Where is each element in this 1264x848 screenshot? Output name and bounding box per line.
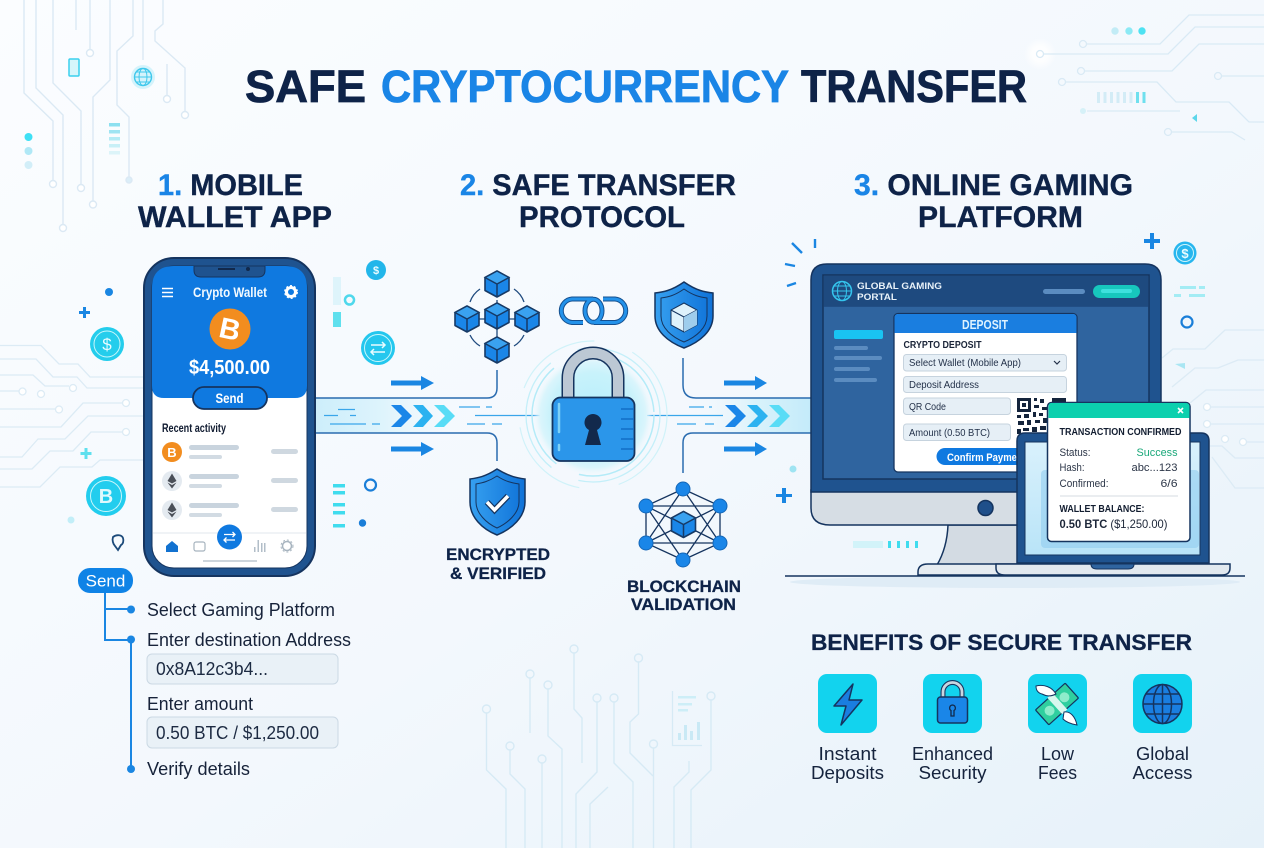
hash row [1060, 462, 1178, 474]
activity row: bitcoin: B [167, 445, 177, 460]
popup header [1048, 403, 1190, 418]
label: blockchain validation: VALIDATION [631, 595, 736, 614]
central padlock [519, 341, 667, 489]
panel: mobile wallet phone [144, 258, 315, 576]
icon: dollar coin [90, 327, 124, 361]
chin [811, 490, 1160, 525]
label: encrypted and verified: ENCRYPTED [446, 545, 550, 564]
select wallet field [904, 354, 1066, 371]
chevrons [391, 405, 455, 427]
field: amount: 0.50 BTC / $1,250.00 [156, 723, 319, 743]
popup heading: TRANSACTION CONFIRMED [1060, 426, 1182, 438]
decorative icons: top left [24, 59, 155, 169]
icon: chain link [561, 299, 626, 322]
menu icon [162, 288, 173, 296]
confirmed row: Confirmed: [1060, 478, 1108, 490]
decorative marks near monitor [776, 233, 1205, 548]
benefit: global access [1132, 674, 1192, 783]
send pill [78, 568, 133, 593]
icon: globe [131, 65, 155, 89]
portal name: PORTAL [857, 292, 897, 303]
send pill: Send [86, 572, 125, 590]
select wallet field: Select Wallet (Mobile App) [909, 357, 1021, 369]
label: Fees [1038, 763, 1077, 783]
divider [1060, 495, 1178, 497]
label: Low [1041, 744, 1075, 764]
transfer band right [647, 358, 811, 473]
portal header [824, 276, 1148, 307]
field: address: 0x8A12c3b4... [156, 659, 268, 679]
decorative circuit: top right [1024, 15, 1264, 140]
heading: benefits: BENEFITS OF SECURE TRANSFER [811, 630, 1192, 655]
hash row: Hash: [1060, 462, 1084, 474]
confirmed row [1060, 478, 1178, 490]
label [811, 744, 884, 783]
qr code field [904, 398, 1010, 414]
title: TRANSFER [801, 61, 1027, 112]
amount field [904, 424, 1010, 440]
label: Access [1132, 763, 1192, 783]
close icon [1178, 408, 1183, 413]
send steps list [78, 568, 351, 779]
decorative circuit: top left [24, 0, 188, 232]
step: verify: Verify details [147, 759, 250, 779]
label: Global [1136, 744, 1189, 764]
glow [519, 341, 667, 489]
label: blockchain validation: BLOCKCHAIN [627, 577, 741, 596]
step: destination: Enter destination Address [147, 630, 351, 650]
deposit address field: Deposit Address [909, 379, 979, 391]
label: encrypted and verified [446, 545, 550, 583]
keyhole [585, 414, 602, 445]
heading: step 2: PROTOCOL [519, 201, 685, 234]
qr code field: QR Code [909, 401, 946, 413]
qr code [1017, 398, 1066, 434]
decorative circuit: right middle [1162, 330, 1264, 488]
laptop base [996, 564, 1230, 575]
icon: globe [1143, 684, 1182, 724]
screen [823, 275, 1149, 479]
right bars and rings [333, 277, 376, 528]
bottom navigation [153, 533, 306, 562]
speed lines [647, 407, 723, 424]
icon: phone outline [69, 59, 79, 76]
phone body [144, 258, 315, 576]
benefit: low fees [1028, 674, 1087, 783]
heading: step 1: WALLET APP [138, 201, 332, 234]
swap button [217, 524, 242, 550]
recent activity label: Recent activity [162, 423, 226, 435]
bitcoin logo: B [216, 312, 243, 348]
panel: desktop monitor [811, 264, 1161, 575]
decorative circuit: bottom centre [482, 645, 715, 848]
decorative circuit: left middle [0, 346, 143, 487]
label [1038, 744, 1077, 783]
arrows [391, 376, 767, 456]
phone screen [152, 266, 307, 568]
shield outline glyph [113, 535, 123, 550]
amount field: Amount (0.50 BTC) [909, 427, 990, 439]
highlight and ticks [558, 404, 560, 450]
panel: confirmation popup [1048, 402, 1190, 542]
title: CRYPTOCURRENCY [381, 61, 789, 112]
status row: Status: [1060, 447, 1090, 459]
icon: blockchain cluster [455, 271, 539, 363]
heading: step 2: 2. SAFE TRANSFER [460, 169, 736, 202]
bitcoin logo [210, 308, 250, 350]
benefit: enhanced security [912, 674, 993, 783]
icon: blockchain network [639, 482, 727, 567]
globe logo [832, 282, 852, 300]
confirm button: Confirm Payme [947, 452, 1017, 464]
title [245, 61, 1027, 112]
laptop lid [1017, 433, 1209, 563]
activity row: ether [162, 471, 298, 491]
chevrons [725, 405, 790, 427]
activity row: bitcoin [162, 442, 298, 462]
panel: laptop [996, 402, 1230, 575]
decorative icons around phone [68, 260, 395, 550]
field: address [147, 654, 338, 684]
lock body [552, 398, 634, 461]
label: Security [918, 763, 986, 783]
deposit panel [894, 314, 1077, 472]
status row [1060, 447, 1178, 459]
hash row: abc...123 [1132, 462, 1178, 474]
label [1132, 744, 1192, 783]
plus and dots [79, 288, 113, 318]
wallet header [152, 266, 307, 398]
step: amount: Enter amount [147, 694, 253, 714]
confirmed row: 6/6 [1160, 478, 1178, 490]
nav pills [1043, 285, 1140, 298]
deposit header: DEPOSIT [962, 318, 1008, 332]
decorative marks near monitor: $ [1181, 246, 1189, 261]
field: amount [147, 717, 338, 748]
icon: padlock [938, 682, 968, 723]
speaker [218, 267, 250, 271]
icon: check shield [470, 469, 525, 535]
ground line [785, 576, 1245, 588]
heading: step 2 [460, 169, 736, 234]
icon: swap coin [361, 331, 395, 365]
activity row: ether [162, 500, 298, 520]
icon: small dollar coin: $ [373, 265, 379, 277]
connector lines [105, 592, 135, 773]
label [912, 744, 993, 783]
small dot [68, 516, 74, 524]
icon: bitcoin coin: B [99, 486, 113, 508]
icon: faint chart [672, 691, 702, 746]
sidebar [834, 330, 883, 382]
label: Deposits [811, 763, 884, 783]
popup shadow [1041, 470, 1199, 548]
band rails and branches [316, 370, 497, 461]
decorative dots and dashes: top right [1097, 27, 1197, 122]
send button [193, 387, 267, 409]
deposit address field [904, 376, 1066, 392]
icon: dollar coin: $ [102, 335, 112, 354]
portal name: GLOBAL GAMING [857, 281, 942, 292]
label: encrypted and verified: & VERIFIED [450, 564, 546, 583]
cyan plus [80, 448, 92, 459]
dots [24, 133, 32, 169]
settings icon [285, 286, 297, 298]
icon: bitcoin coin [86, 476, 126, 516]
confirm button [936, 448, 1020, 465]
heading: step 3: 3. ONLINE GAMING [854, 169, 1133, 202]
laptop screen [1025, 442, 1200, 555]
frame [811, 264, 1161, 492]
crypto deposit label: CRYPTO DEPOSIT [904, 339, 982, 351]
label: Enhanced [912, 744, 993, 764]
portal name [857, 281, 942, 303]
icon: small dollar coin [366, 260, 386, 280]
notch [194, 266, 265, 277]
icon: flying money [1035, 682, 1079, 726]
shackle [568, 353, 618, 398]
step: select platform: Select Gaming Platform [147, 600, 335, 620]
band rails and branches [683, 358, 811, 473]
stacked bars [109, 123, 120, 154]
icon: lightning [834, 684, 862, 725]
power button [978, 500, 993, 516]
heading: step 1: 1. MOBILE [158, 169, 303, 202]
screen title: Crypto Wallet [193, 284, 267, 300]
heading: step 1 [138, 169, 332, 234]
transfer band left [316, 370, 540, 461]
icon: shield with cube [655, 282, 713, 348]
title: SAFE [245, 61, 366, 112]
wallet balance label: WALLET BALANCE: [1060, 503, 1144, 515]
stand [937, 525, 1020, 565]
label: Instant [818, 744, 876, 764]
balance: $4,500.00 [189, 357, 270, 379]
send button: Send [216, 390, 244, 406]
speed lines [324, 407, 540, 424]
heading: step 3 [854, 169, 1133, 234]
benefit: instant deposits [811, 674, 884, 783]
heading: step 3: PLATFORM [918, 201, 1083, 234]
wallet balance value: 0.50 BTC ($1,250.00) [1060, 517, 1168, 531]
label: blockchain validation [627, 577, 741, 614]
status row: Success [1136, 447, 1178, 459]
deposit header [894, 314, 1076, 333]
